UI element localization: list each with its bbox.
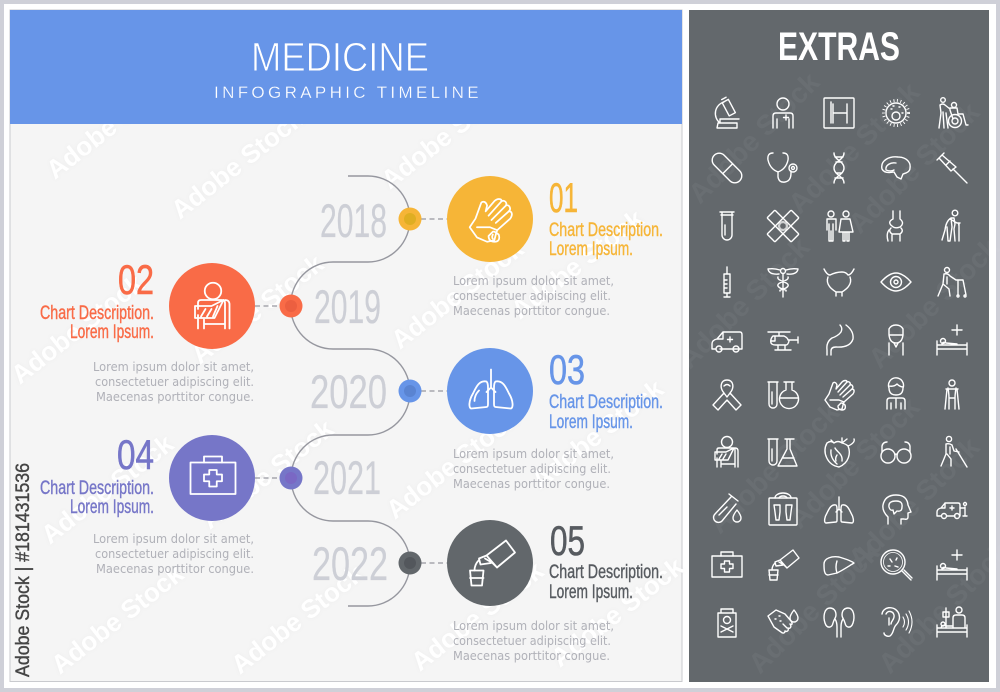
icon: pouring bottle — [769, 550, 799, 580]
icon: poison bottle — [718, 609, 736, 637]
watermark: light panel: Adobe Stock — [225, 558, 369, 680]
year labels: 2018 — [320, 194, 387, 247]
step 05: Lorem ipsum dolor sit amet, — [453, 619, 614, 633]
step 02: Lorem ipsum dolor sit amet, — [93, 360, 254, 374]
icon: ear with sound — [882, 608, 912, 636]
icon: test tube — [720, 212, 734, 240]
step 04: Lorem ipsum dolor sit amet, — [93, 532, 254, 546]
icon: first aid kit — [712, 552, 742, 577]
step 03: consectetuer adipiscing elit. — [453, 462, 611, 476]
icon: crutch — [937, 153, 967, 183]
watermark: light panel: Adobe Stock — [385, 233, 529, 355]
step 01 — [398, 174, 663, 318]
step 03: Lorem Ipsum. — [549, 411, 633, 433]
icon: hand with drop — [825, 380, 854, 410]
step 02: consectetuer adipiscing elit. — [95, 375, 254, 389]
step 05 — [398, 517, 663, 663]
panel: timeline background — [10, 10, 682, 682]
step 04: 04 — [117, 431, 154, 478]
watermark: dark panel: Adobe Stock — [702, 396, 846, 539]
title: MEDICINE — [251, 34, 429, 80]
icon: stethoscope — [768, 153, 797, 182]
watermark: light panel: Adobe Stock — [375, 73, 519, 195]
icon: kidneys — [824, 608, 854, 637]
step 04 — [40, 431, 302, 576]
step 04: Lorem Ipsum. — [70, 496, 154, 518]
step 04: Chart Description. — [40, 477, 154, 499]
icon: lungs — [469, 370, 513, 408]
stock credit, vertical: Adobe Stock | #181431536 — [13, 463, 34, 677]
icon: test tube and flask — [768, 382, 798, 409]
icon: hand with drop — [470, 199, 512, 242]
panel: extras — [672, 10, 1000, 682]
watermark: dark panel: Adobe Stock — [682, 66, 826, 209]
icon: test tube and cone flask — [768, 439, 797, 466]
icon: pill — [709, 150, 745, 186]
icon: syringe — [724, 267, 730, 297]
watermark: dark panel: Adobe Stock — [842, 431, 986, 574]
icon: eye — [881, 273, 911, 291]
icon: brain — [882, 157, 910, 179]
watermark: light panel: Adobe Stock — [165, 103, 309, 225]
icon: pouring bottle — [470, 540, 515, 586]
icon: helicopter — [768, 332, 798, 350]
step 05: Maecenas porttitor congue. — [453, 649, 610, 663]
watermark: light panel: Adobe Stock — [45, 558, 189, 680]
step 02: Chart Description. — [40, 302, 154, 324]
icon: liver — [824, 557, 854, 575]
icon: ambulance — [712, 332, 742, 352]
step 03: Chart Description. — [549, 391, 663, 413]
icon: man with arm sling — [715, 436, 738, 467]
step 02: 02 — [118, 256, 154, 303]
watermark: dark panel: Adobe Stock — [742, 536, 886, 679]
icon: blind person with cane — [941, 436, 967, 467]
icon: small ambulance with person — [937, 502, 967, 518]
watermark: light panel: Adobe Stock — [405, 555, 549, 677]
timeline curve — [291, 176, 410, 606]
step 01: consectetuer adipiscing elit. — [453, 289, 611, 303]
watermark: light panel: Adobe Stock — [185, 248, 329, 370]
step 03 — [398, 346, 663, 491]
icon: bladder — [824, 269, 854, 296]
icon: magnifier over bacteria — [881, 550, 912, 580]
watermark: light panel: Adobe Stock — [525, 373, 669, 495]
watermark: dark panel: Adobe Stock — [842, 96, 986, 239]
step 05: 05 — [550, 517, 585, 564]
step 04: Maecenas porttitor congue. — [96, 562, 254, 576]
step 05: Chart Description. — [549, 561, 663, 583]
watermark: light panel: Adobe Stock — [545, 551, 689, 673]
icon: nurse — [889, 325, 903, 355]
icon: foot scale — [769, 493, 797, 525]
step 01: 01 — [549, 174, 578, 221]
watermark: light panel: Adobe Stock — [195, 413, 339, 535]
icon: lungs — [825, 497, 853, 523]
icon: glasses — [881, 442, 911, 463]
step 03: 03 — [549, 346, 585, 393]
icon: arm in sling — [195, 283, 230, 328]
icon: caduceus — [768, 268, 798, 297]
icon: head with brain — [883, 495, 911, 524]
icon: microscope — [715, 97, 739, 128]
watermark: dark panel — [672, 66, 1000, 679]
year labels: 2022 — [312, 537, 388, 590]
icon: knee joint — [887, 211, 902, 241]
step 04: consectetuer adipiscing elit. — [95, 547, 254, 561]
icon: heart organ — [825, 438, 854, 467]
icon: person with walker — [938, 268, 966, 297]
step 01: Lorem Ipsum. — [549, 238, 633, 260]
watermark: light panel: Adobe Stock — [505, 203, 649, 325]
watermark: light panel: Adobe Stock — [40, 63, 184, 185]
year labels: 2019 — [314, 280, 381, 333]
watermark: light panel: Adobe Stock — [5, 268, 149, 390]
year labels — [310, 194, 388, 590]
icon: man and woman — [827, 211, 853, 241]
header banner — [10, 10, 682, 124]
icon: virus — [884, 100, 908, 126]
year labels: 2020 — [310, 365, 387, 418]
watermark: light panel: Adobe Stock — [380, 403, 524, 525]
step 01: Maecenas porttitor congue. — [453, 304, 610, 318]
step 01: Lorem ipsum dolor sit amet, — [453, 274, 614, 288]
icon: bandage — [759, 202, 807, 250]
watermark: dark panel: Adobe Stock — [782, 76, 926, 219]
icon: elderly with cane — [942, 210, 960, 241]
extras heading: EXTRAS — [778, 25, 900, 69]
icon: first aid kit — [190, 456, 236, 494]
step 05: Lorem Ipsum. — [549, 581, 633, 603]
icon: hospital sign — [824, 98, 854, 128]
icon: man — [887, 378, 905, 409]
icon: hand washing with drop — [768, 610, 798, 633]
year labels: 2021 — [313, 451, 381, 504]
icon: wheelchair assistance — [939, 98, 968, 128]
icon: ribbon — [713, 380, 741, 410]
icon: stomach — [827, 325, 853, 355]
icon: patient in bed with iv and doctor — [937, 607, 967, 637]
step 03: Lorem ipsum dolor sit amet, — [453, 447, 614, 461]
watermark: light panel — [5, 63, 689, 680]
icon: test tube with drop — [714, 494, 741, 522]
watermark: dark panel: Adobe Stock — [672, 231, 816, 374]
icon: hospital bed with plus — [937, 550, 967, 580]
step 05: consectetuer adipiscing elit. — [453, 634, 611, 648]
icon: hospital bed with plus — [937, 325, 967, 355]
step 02: Lorem Ipsum. — [70, 321, 154, 343]
icon: man with crutches — [945, 380, 959, 409]
step 03: Maecenas porttitor congue. — [453, 477, 610, 491]
watermark: dark panel: Adobe Stock — [782, 391, 926, 534]
icon: dna — [834, 153, 844, 183]
step 02: Maecenas porttitor congue. — [96, 390, 254, 404]
watermark: light panel: Adobe Stock — [35, 428, 179, 550]
icon: doctor — [773, 98, 793, 128]
subtitle: INFOGRAPHIC TIMELINE — [214, 83, 482, 102]
step 01: Chart Description. — [549, 219, 663, 241]
step 02 — [40, 256, 302, 404]
